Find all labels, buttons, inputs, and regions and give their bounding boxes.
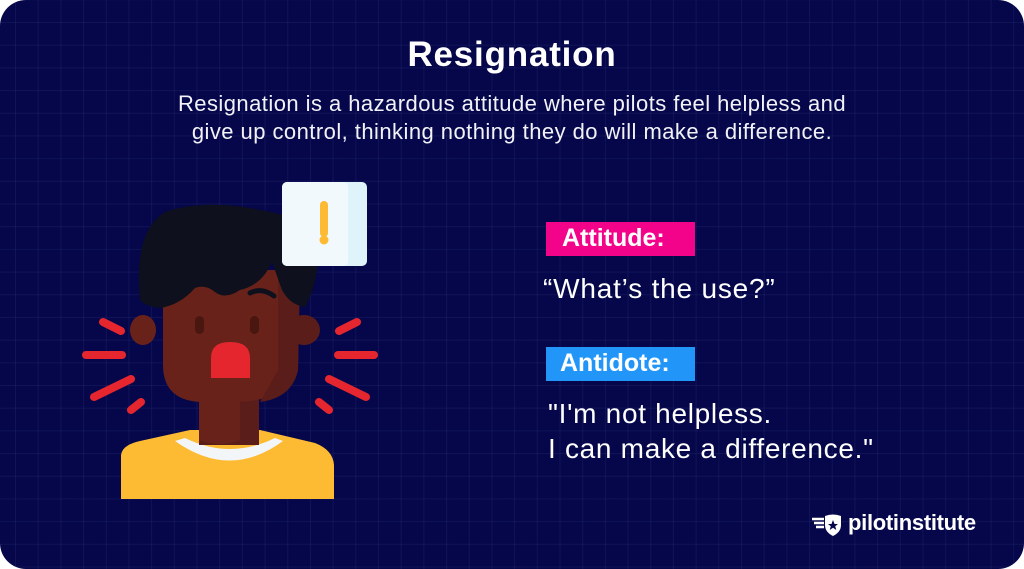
title: Resignation (407, 35, 617, 74)
person (121, 205, 334, 499)
antidote quote: I can make a difference." (548, 433, 874, 464)
subtitle description (178, 91, 846, 144)
subtitle description: Resignation is a hazardous attitude where pilots feel helpless and (178, 91, 846, 116)
attitude quote: “What’s the use?” (543, 273, 776, 304)
attitude label: Attitude: (562, 224, 665, 252)
antidote quote: "I'm not helpless. (548, 398, 772, 429)
subtitle description: give up control, thinking nothing they do will make a difference. (192, 119, 832, 144)
antidote quote (548, 398, 874, 464)
icon: exclamation speech box (282, 182, 367, 266)
illustration: shocked person (82, 182, 378, 499)
logo: pilotinstitute: pilotinstitute (848, 510, 976, 535)
attitude label (546, 222, 695, 256)
icon: alarm lines (86, 322, 374, 410)
antidote label: Antidote: (560, 349, 670, 377)
antidote label (546, 347, 695, 381)
